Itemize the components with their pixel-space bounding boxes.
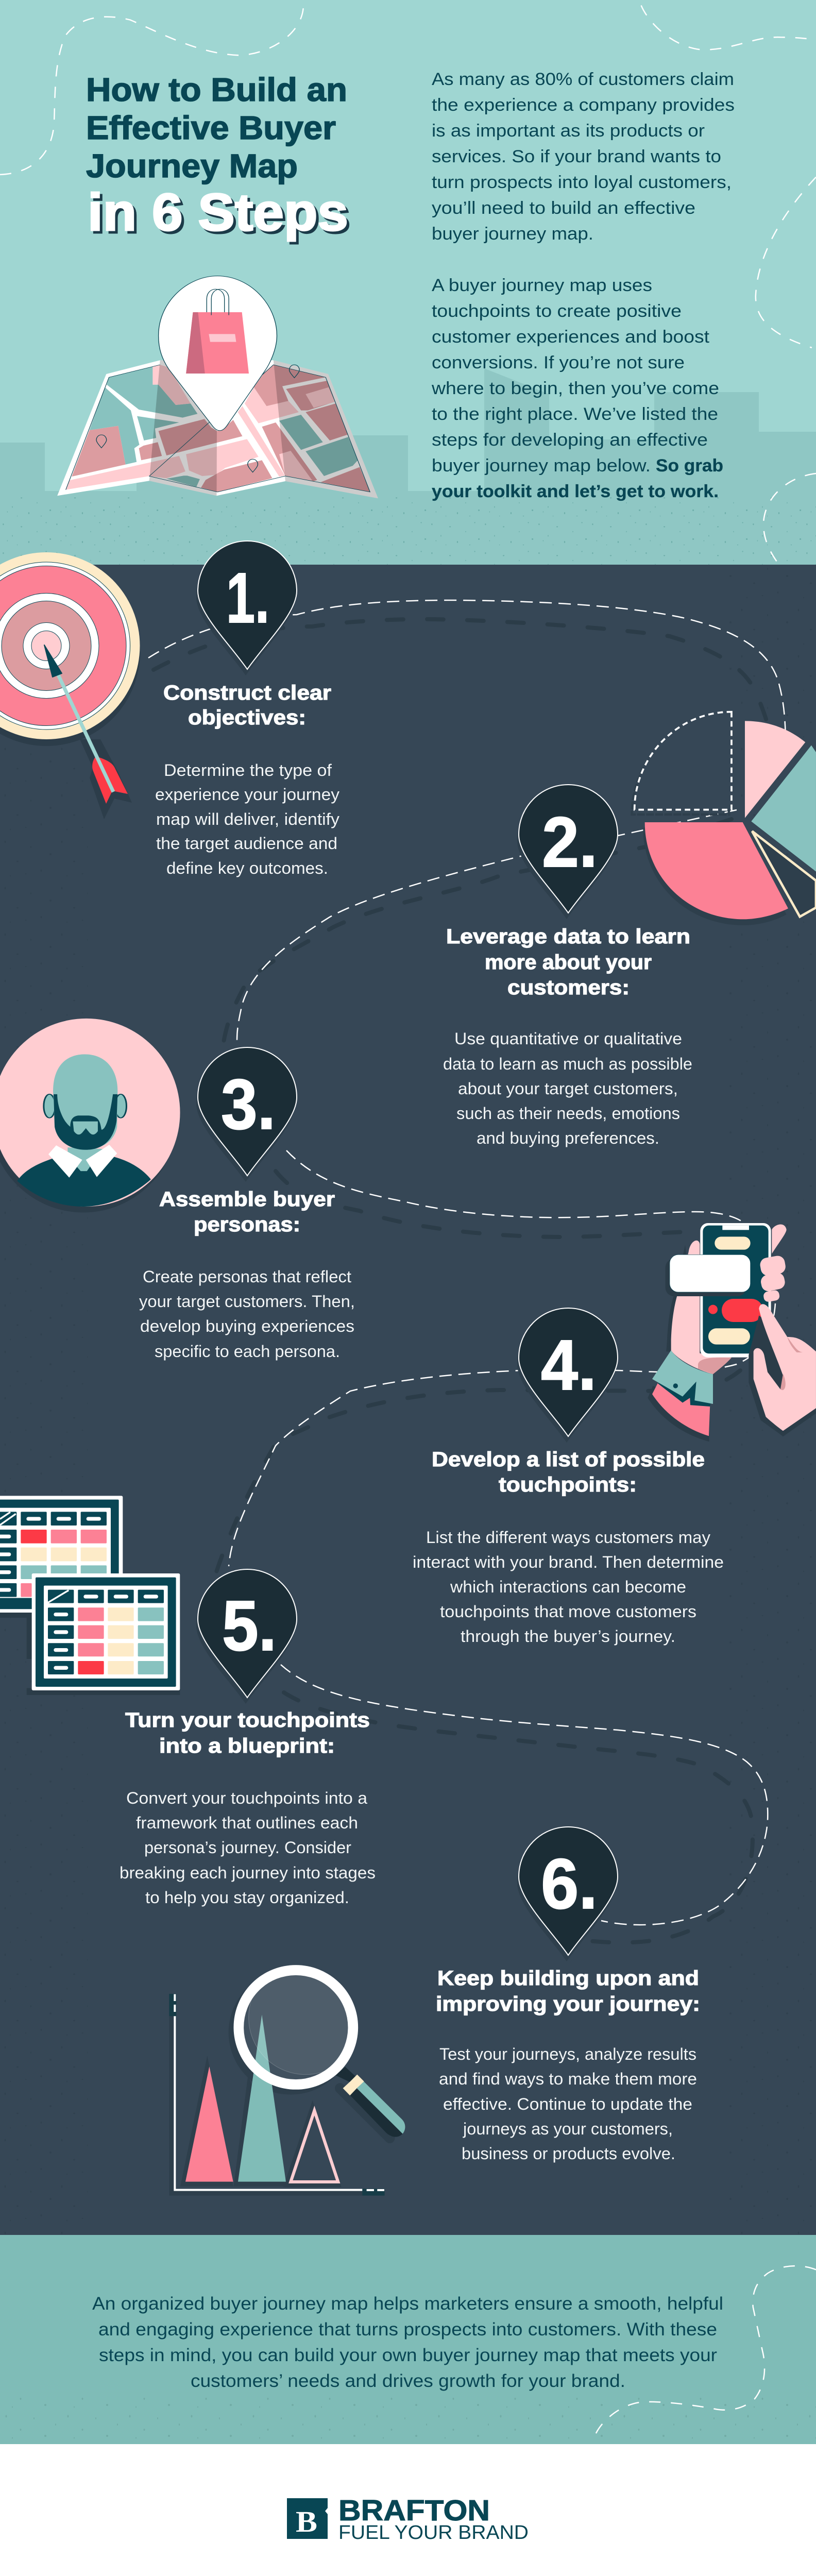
text: step 3 body: Create personas that reflect [143, 1267, 351, 1286]
text: step 4 body: touchpoints that move customers [440, 1602, 696, 1621]
icon: Brafton logo mark: B [296, 2505, 317, 2538]
text: step 3 body: develop buying experiences [140, 1317, 354, 1335]
logo wordmark [338, 2494, 529, 2544]
panel: intro background [0, 0, 816, 567]
text: step 3 body [139, 1267, 355, 1361]
decorative dashed trail top left [0, 4, 816, 567]
text: step 6 body: Test your journeys, analyze results [439, 2045, 696, 2063]
text: closing paragraph: steps in mind, you can build your own buyer journey map that meets your [99, 2345, 717, 2365]
text: step 3 body: specific to each persona. [155, 1342, 340, 1361]
icon: Brafton logo mark [287, 2498, 328, 2539]
text: step 5 body [120, 1789, 376, 1907]
text: step 4 body: interact with your brand. Then determine [413, 1553, 724, 1571]
intro text block: A buyer journey map uses [432, 276, 652, 295]
text: step 4 body: which interactions can become [450, 1578, 686, 1596]
heading: step 4: Develop a list of possible [432, 1448, 705, 1471]
intro text block: So grab [656, 456, 723, 476]
text: step 6 body: business or products evolve. [462, 2144, 675, 2163]
heading: step 6: Keep building upon and [437, 1967, 699, 1990]
heading: step 6 [436, 1967, 700, 2015]
text: step 1 body: experience your journey [155, 785, 339, 804]
intro text block: is as important as its products or [432, 121, 705, 141]
journey dashed paths [148, 600, 786, 1925]
step 3 [139, 1047, 355, 1361]
heading: step 5: Turn your touchpoints [125, 1709, 370, 1732]
icon: pin 3: 3. [221, 1065, 276, 1144]
text: closing paragraph: An organized buyer journey map helps marketers ensure a smooth, helpful [92, 2294, 723, 2314]
icon: folded map with shopping pin [57, 276, 378, 498]
intro text block: your toolkit and let’s get to work. [432, 482, 719, 501]
heading: step 5: into a blueprint: [159, 1735, 335, 1757]
text: step 2 body: Use quantitative or qualitative [454, 1029, 682, 1048]
intro text block: where to begin, then you’ve come [431, 379, 719, 398]
intro text block: buyer journey map below. [432, 456, 651, 476]
icon: pin 3 [196, 1047, 297, 1182]
heading: step 2: Leverage data to learn [446, 925, 690, 948]
text: step 4 body: List the different ways customers may [426, 1528, 710, 1547]
heading: step 1: objectives: [188, 706, 306, 729]
icon: target with arrow [0, 552, 140, 819]
icon: pin 1 [196, 541, 297, 675]
icon: pin 1: 1. [226, 558, 269, 638]
step 1 [155, 541, 339, 877]
text: step 5 body: persona’s journey. Consider [144, 1838, 351, 1857]
intro text block: customer experiences and boost [432, 327, 710, 347]
heading: step 1 [163, 682, 331, 729]
icon: pin 2 [517, 785, 618, 919]
text: closing paragraph [92, 2294, 723, 2391]
intro text block: buyer journey map. [432, 224, 593, 244]
icon: pie chart [632, 712, 816, 925]
text: step 2 body: about your target customers, [458, 1079, 678, 1098]
icon: bearded persona avatar [0, 1019, 180, 1212]
icon: hands holding phone [648, 1223, 816, 1442]
text: step 2 body [443, 1029, 692, 1147]
text: step 5 body: Convert your touchpoints into a [126, 1789, 367, 1807]
text: step 1 body [155, 761, 339, 877]
text: closing paragraph: and engaging experience that turns prospects into customers. With these [98, 2319, 717, 2340]
intro text block: the experience a company provides [432, 95, 735, 115]
title: Journey Map [86, 147, 298, 184]
intro text block: turn prospects into loyal customers, [432, 173, 732, 192]
text: step 5 body: framework that outlines each [136, 1814, 358, 1832]
panel: footer [0, 2444, 816, 2576]
text: step 4 body [413, 1528, 724, 1646]
title: Effective Buyer [86, 109, 336, 146]
icon: pin 6 [517, 1827, 618, 1961]
text: step 1 body: map will deliver, identify [156, 810, 339, 828]
text: step 5 body: to help you stay organized. [145, 1888, 349, 1907]
icon: large white pin with shopping bag [159, 276, 277, 431]
intro text block [431, 70, 735, 501]
text: step 6 body: effective. Continue to update the [443, 2095, 692, 2113]
step 4 [413, 1308, 724, 1646]
intro text block: services. So if your brand wants to [432, 147, 721, 166]
intro text block: steps for developing an effective [432, 430, 708, 450]
text: step 1 body: the target audience and [156, 834, 337, 853]
icon: pin 5 [196, 1569, 297, 1704]
heading: step 3: personas: [194, 1213, 300, 1236]
heading: step 5 [125, 1709, 370, 1757]
icon: small map pins [96, 365, 299, 472]
intro text block: As many as 80% of customers claim [432, 70, 734, 89]
text: step 5 body: breaking each journey into stages [120, 1863, 376, 1882]
heading: step 6: improving your journey: [436, 1993, 700, 2015]
speckled ground [0, 497, 816, 565]
heading: step 1: Construct clear [163, 682, 331, 704]
icon: pin 4: 4. [541, 1326, 597, 1405]
heading: step 2 [446, 925, 690, 999]
panel: dark steps background [0, 565, 816, 2235]
icon: pin 2: 2. [542, 803, 598, 882]
text: step 6 body: journeys as your customers, [463, 2120, 673, 2138]
text: step 1 body: Determine the type of [164, 761, 332, 779]
heading: step 3: Assemble buyer [159, 1188, 335, 1211]
text: step 2 body: such as their needs, emotions [456, 1104, 680, 1123]
step 6 [436, 1827, 700, 2163]
logo wordmark: FUEL YOUR BRAND [338, 2522, 529, 2544]
intro text block: to the right place. We’ve listed the [432, 404, 718, 424]
title [86, 71, 348, 242]
step 2 [443, 785, 692, 1147]
journey path shadows [154, 619, 770, 1942]
panel: closing band [0, 2235, 816, 2444]
skyline buildings [0, 368, 816, 565]
icon: pin 6: 6. [541, 1844, 598, 1924]
title: How to Build an [86, 71, 347, 108]
heading: step 4: touchpoints: [499, 1473, 637, 1496]
step 5 [120, 1569, 376, 1907]
text: step 2 body: and buying preferences. [477, 1129, 659, 1147]
heading: step 3 [159, 1188, 335, 1236]
icon: triangle chart with magnifying glass [169, 1960, 405, 2196]
icon: overlapping tables [0, 1496, 180, 1695]
intro text block: touchpoints to create positive [432, 301, 682, 321]
intro text block: you’ll need to build an effective [432, 198, 695, 218]
heading: step 2: customers: [507, 976, 630, 999]
heading: step 4 [432, 1448, 705, 1496]
text: closing paragraph: customers’ needs and drives growth for your brand. [191, 2371, 625, 2391]
text: step 6 body [439, 2045, 697, 2163]
text: step 6 body: and find ways to make them more [439, 2070, 697, 2088]
icon: pin 4 [517, 1308, 618, 1443]
text: step 3 body: your target customers. Then, [139, 1292, 355, 1311]
icon: pin 5: 5. [222, 1586, 277, 1666]
title: in 6 Steps [88, 183, 348, 242]
heading: step 2: more about your [485, 951, 652, 974]
text: step 1 body: define key outcomes. [166, 859, 328, 877]
text: step 2 body: data to learn as much as possible [443, 1055, 692, 1073]
logo wordmark: BRAFTON [338, 2494, 490, 2527]
text: step 4 body: through the buyer’s journey. [461, 1627, 675, 1646]
intro text block: conversions. If you’re not sure [432, 353, 685, 372]
